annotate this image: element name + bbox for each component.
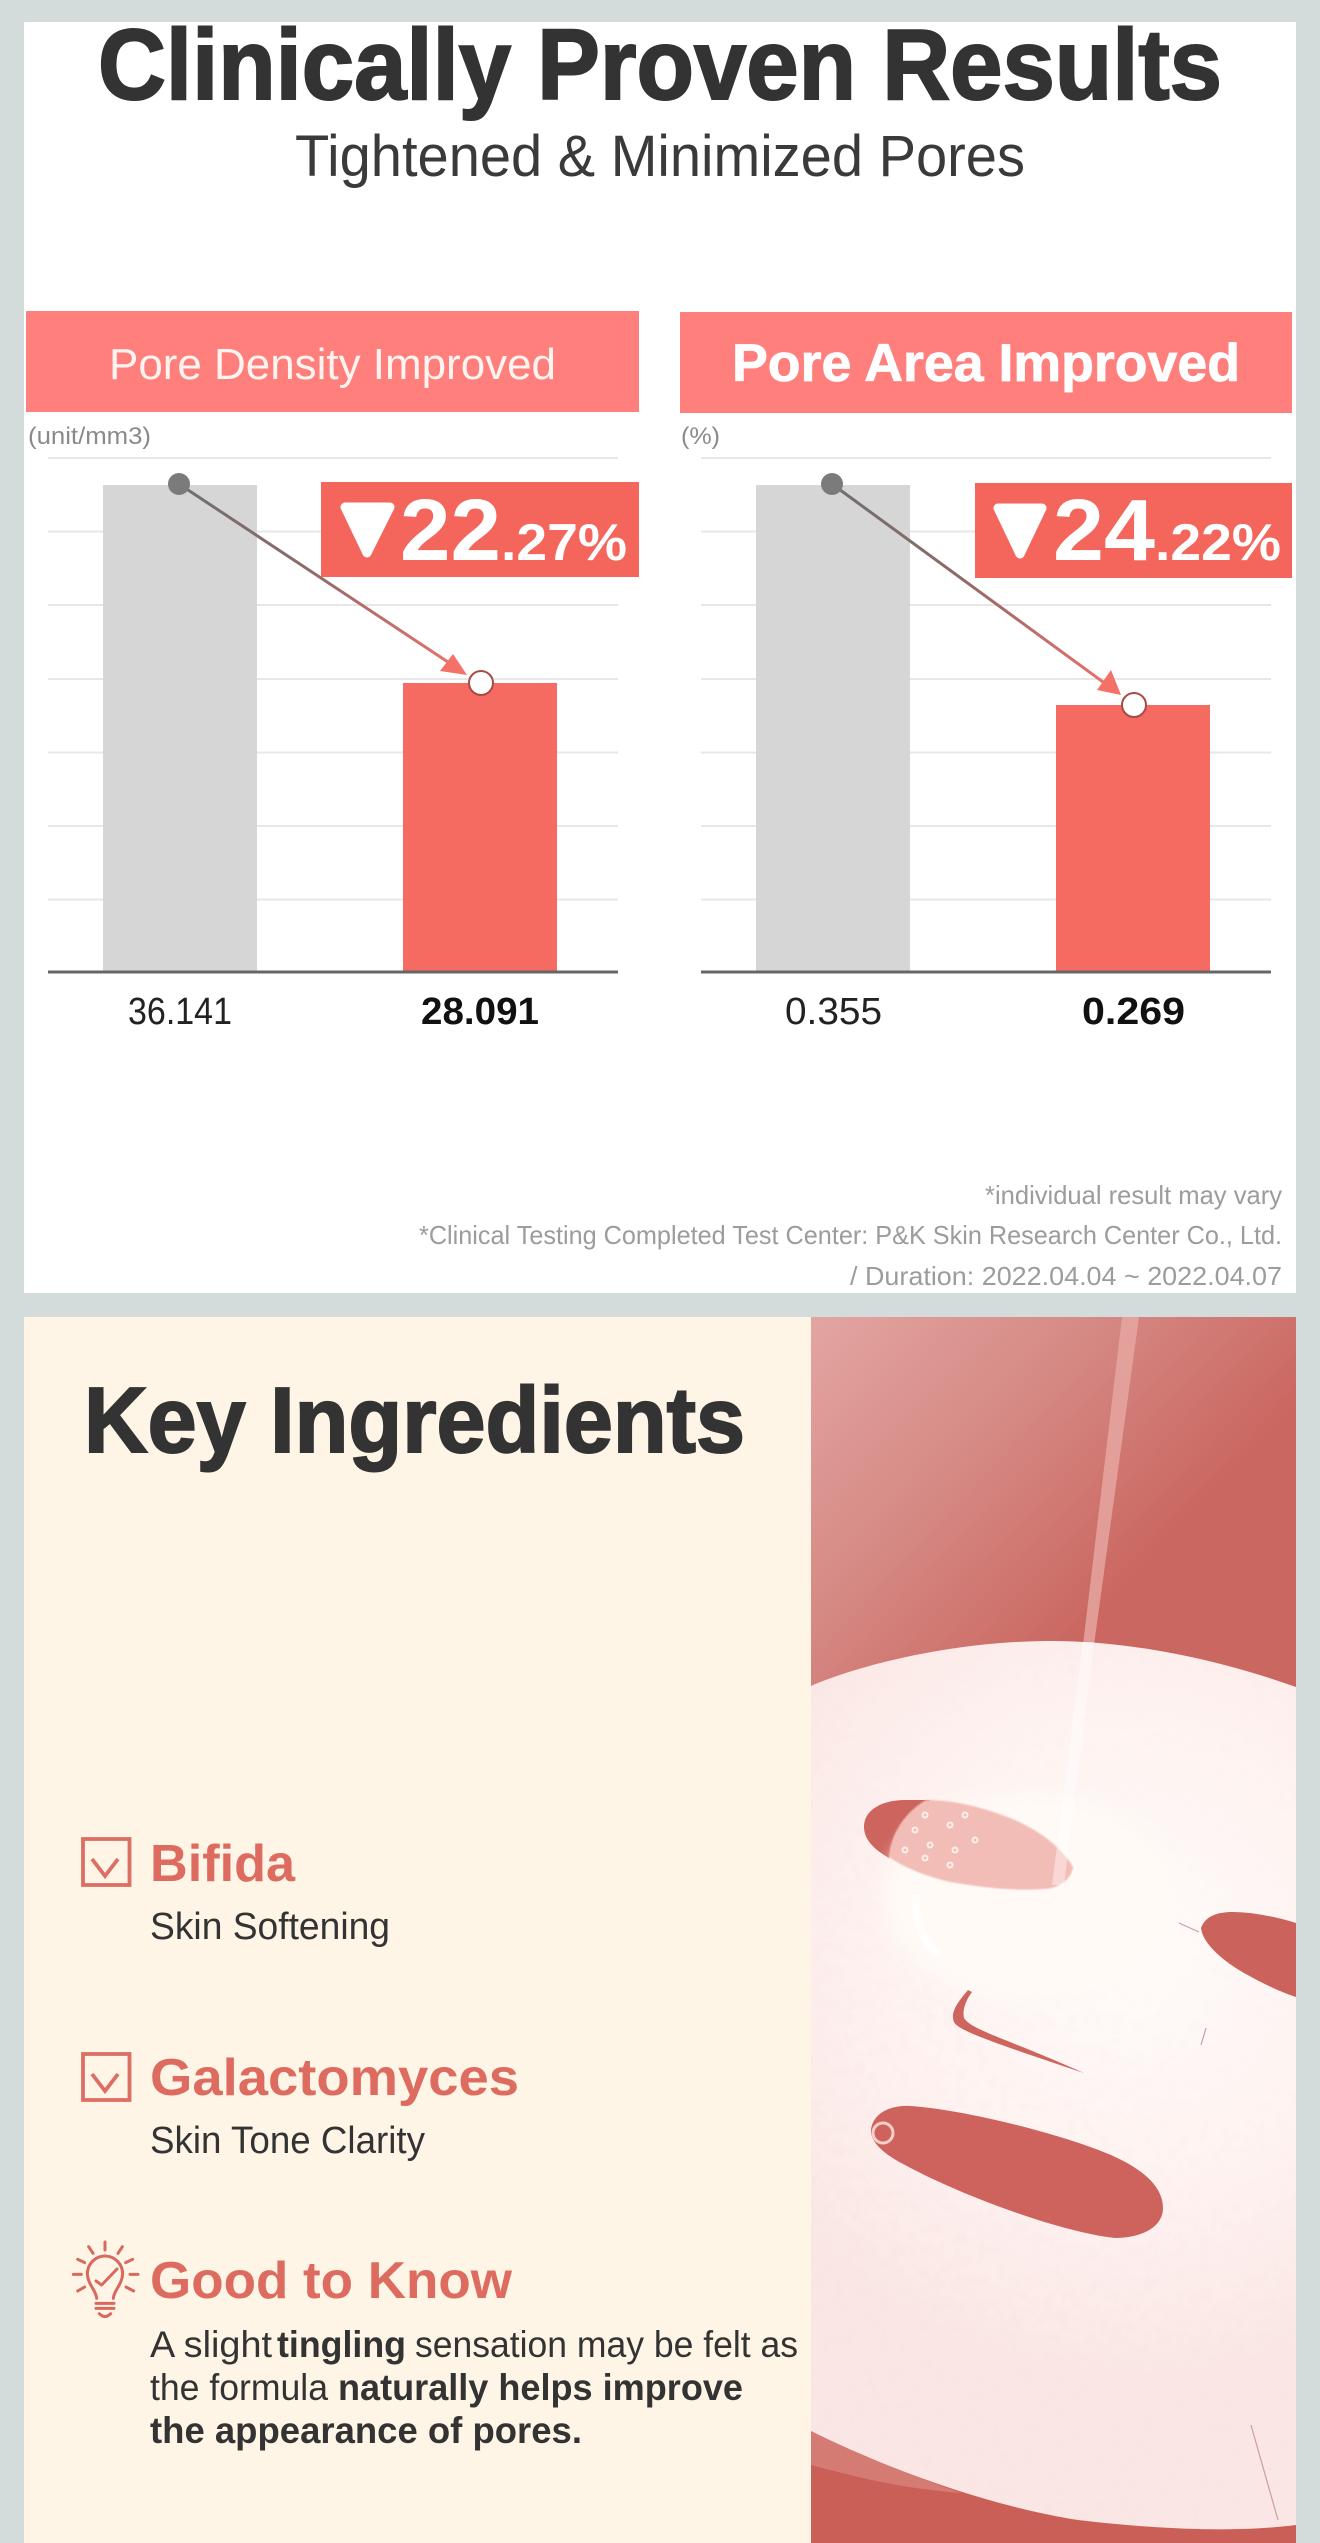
fold in mask [953, 1990, 1084, 2073]
panel: clinically proven results [24, 9, 1296, 1293]
badge: 22.27% [321, 482, 639, 579]
value: after: 28.091 [421, 991, 539, 1033]
description: the formula [150, 2367, 328, 2408]
footnotes: *individual result may vary [985, 1180, 1282, 1210]
icon: checkbox [83, 1839, 130, 1885]
icon: checkbox [83, 2054, 130, 2100]
description: naturally helps improve [338, 2367, 743, 2408]
header bar: pore area [680, 312, 1292, 413]
subtitle: Tightened & Minimized Pores [295, 124, 1025, 189]
right eye hole [1201, 1912, 1296, 1997]
header bar: pore area: Pore Area Improved [732, 334, 1240, 393]
footnotes [419, 1180, 1282, 1291]
badge: 24.22% [975, 482, 1292, 579]
description [150, 2324, 798, 2451]
stream over mask [1052, 1642, 1094, 1885]
badge: 24.22%: .22% [1155, 514, 1281, 572]
footnotes: / Duration: 2022.04.04 ~ 2022.04.07 [850, 1261, 1282, 1291]
arrow: decline [821, 473, 1146, 717]
header bar: pore density [26, 311, 639, 412]
sheet mask [811, 1641, 1296, 2529]
badge: 22.27%: 22 [400, 482, 501, 579]
title: Clinically Proven Results [98, 9, 1222, 121]
ingredient: galactomyces: Galactomyces [150, 2049, 519, 2107]
bar: before [103, 485, 257, 971]
photo: sheet mask with essence pour [811, 1317, 1296, 2543]
bar: after [1056, 705, 1210, 971]
badge: 22.27%: .27% [501, 514, 627, 572]
mouth hole [871, 2106, 1163, 2238]
hairlines [1179, 1923, 1278, 2520]
description: the appearance of pores. [150, 2410, 582, 2451]
bar: after [403, 683, 557, 971]
ingredient: bifida [83, 1835, 390, 1948]
heading: Key Ingredients [84, 1368, 745, 1472]
value: before: 0.355 [785, 991, 882, 1033]
good to know: Good to Know [150, 2252, 513, 2310]
bubbles [902, 1812, 978, 1868]
ingredient: galactomyces [83, 2049, 519, 2162]
chart: pore density [26, 311, 639, 1033]
icon: light bulb [73, 2242, 138, 2316]
essence pool [882, 1840, 962, 1974]
ingredient: galactomyces: Skin Tone Clarity [150, 2120, 425, 2162]
unit label: (%) [681, 423, 720, 450]
bubble in mouth [873, 2123, 893, 2143]
essence stream [1083, 1317, 1139, 1645]
footnotes: *Clinical Testing Completed Test Center: P&K Skin Research Center Co., Ltd. [419, 1220, 1282, 1250]
panel: key ingredients [24, 1317, 811, 2543]
badge: 24.22%: 24 [1053, 482, 1155, 579]
description: A slight [150, 2324, 273, 2365]
eye seen through pool [889, 1800, 1073, 1890]
chart: pore area [680, 312, 1292, 1033]
good to know [73, 2242, 798, 2451]
bar: before [756, 485, 910, 971]
header bar: pore density: Pore Density Improved [109, 340, 556, 389]
value: after: 0.269 [1082, 991, 1185, 1033]
arrow: decline [168, 473, 493, 695]
left eye hole [864, 1800, 930, 1858]
description: sensation may be felt as [415, 2324, 798, 2365]
ingredient: bifida: Skin Softening [150, 1906, 390, 1948]
value: before: 36.141 [128, 991, 232, 1033]
description: tingling [277, 2324, 406, 2365]
ingredient: bifida: Bifida [150, 1835, 296, 1893]
unit label: (unit/mm3) [28, 423, 151, 450]
